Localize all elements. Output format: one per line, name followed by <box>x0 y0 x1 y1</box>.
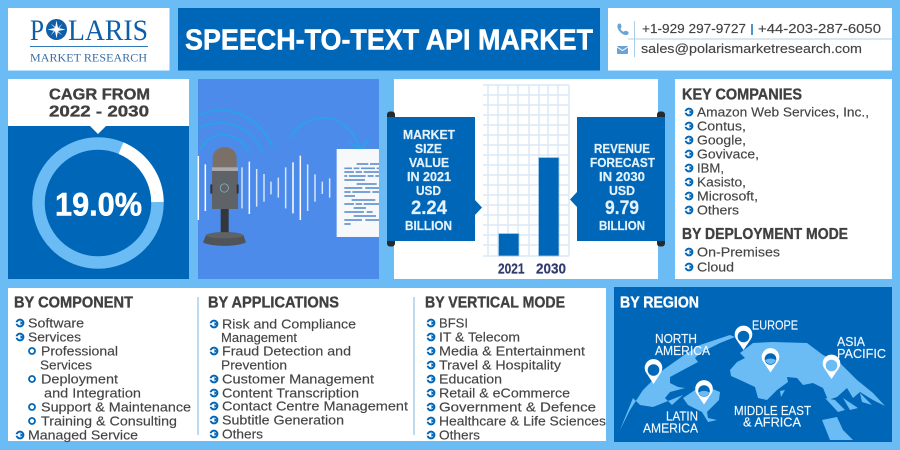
axis labels <box>498 262 566 278</box>
donut chart <box>38 144 158 262</box>
list: component <box>15 316 191 442</box>
list: component: Professional <box>41 344 118 358</box>
panel: by region <box>614 287 892 442</box>
transcript document <box>337 149 379 237</box>
callout: revenue forecast: 9.79 <box>605 198 639 219</box>
list: key companies: Google, <box>697 132 746 148</box>
list: applications: Management <box>221 330 297 345</box>
list: key companies: Contus, <box>697 118 746 134</box>
list: key companies: Others <box>697 202 740 218</box>
CAGR heading <box>49 86 150 120</box>
list: applications: Contact Centre Management <box>222 398 408 414</box>
CAGR heading: 2022 - 2030 <box>49 104 149 120</box>
list: key companies: IBM, <box>697 160 724 176</box>
phone numbers: +1-929 297-9727 <box>642 21 746 36</box>
list: component: Deployment <box>41 372 118 386</box>
list: key companies: Microsoft, <box>697 188 758 204</box>
title banner: SPEECH-TO-TEXT API MARKET <box>185 24 593 56</box>
list: component: Managed Service <box>28 428 138 442</box>
list: applications: Prevention <box>221 358 287 372</box>
contact panel <box>608 8 892 70</box>
phone numbers <box>642 21 881 36</box>
microphone <box>203 147 246 246</box>
callout: market size value: IN 2021 <box>407 169 451 184</box>
label: Middle East and Africa: & AFRICA <box>743 414 801 430</box>
list: vertical mode: Travel & Hospitality <box>439 358 562 372</box>
panel: segments <box>8 288 607 442</box>
heading: by applications: BY APPLICATIONS <box>208 294 339 312</box>
sound arcs <box>198 110 272 153</box>
panel: key companies and deployment mode <box>675 79 892 279</box>
list: deployment mode: On-Premises <box>697 244 781 260</box>
list: key companies: Kasisto, <box>697 174 746 190</box>
panel: speech illustration <box>198 79 379 279</box>
list: component: Services <box>40 358 93 372</box>
list: key companies: Amazon Web Services, Inc., <box>697 104 869 120</box>
icon: phone <box>617 23 629 35</box>
heading: by component: BY COMPONENT <box>14 294 133 312</box>
label: Europe: EUROPE <box>752 318 798 332</box>
list: key companies <box>684 104 869 218</box>
CAGR heading: CAGR FROM <box>49 86 150 104</box>
pin: Middle East and Africa <box>762 348 779 372</box>
callout: revenue forecast: REVENUE <box>594 141 650 156</box>
callout: market size value: 2.24 <box>411 198 447 219</box>
callout: revenue forecast: IN 2030 <box>599 169 645 184</box>
list: applications: Customer Management <box>222 372 374 386</box>
callout: market size value: VALUE <box>409 155 449 170</box>
list: applications: Subtitle Generation <box>222 412 344 428</box>
list: component: Training & Consulting <box>41 414 177 428</box>
callout: revenue forecast: USD <box>609 183 635 198</box>
list: component: Services <box>28 330 82 344</box>
axis labels: 2021 <box>498 262 524 278</box>
callout: revenue forecast <box>570 112 665 246</box>
list: component: Software <box>28 316 84 330</box>
list: applications: Others <box>222 426 264 442</box>
list: vertical mode: IT & Telecom <box>439 330 520 344</box>
axis labels: 2030 <box>536 262 566 278</box>
world map <box>620 335 885 440</box>
logo: Polaris Market Research <box>8 8 170 70</box>
list: vertical mode: Education <box>439 372 502 386</box>
callout: market size value: BILLION <box>405 218 452 233</box>
logo: Polaris Market Research: P <box>30 14 44 47</box>
list: vertical mode: Government & Defence <box>439 400 596 414</box>
heading: by region: BY REGION <box>620 294 699 312</box>
label: Middle East and Africa: MIDDLE EAST <box>734 403 811 418</box>
list: deployment mode <box>684 244 781 274</box>
callout: market size value <box>387 112 482 246</box>
list: vertical mode: Media & Entertainment <box>439 344 585 358</box>
bar chart grid <box>483 85 569 256</box>
callout: revenue forecast: BILLION <box>599 218 645 233</box>
label: Latin America <box>643 408 698 436</box>
CAGR value: 19.0% <box>55 186 142 222</box>
label: Middle East and Africa <box>734 403 811 430</box>
sound wave <box>198 156 330 220</box>
list: vertical mode <box>426 316 607 442</box>
list: component: Support & Maintenance <box>41 400 191 414</box>
list: applications <box>209 316 408 442</box>
label: Asia Pacific: PACIFIC <box>837 346 886 361</box>
heading: by vertical mode: BY VERTICAL MODE <box>425 294 565 312</box>
list: vertical mode: BFSI <box>439 316 468 330</box>
list: vertical mode: Healthcare & Life Sciences <box>439 414 607 428</box>
heading: by deployment mode: BY DEPLOYMENT MODE <box>682 226 848 243</box>
pin: Latin America <box>695 380 713 404</box>
logo: Polaris Market Research: MARKET RESEARCH <box>30 50 147 64</box>
label: Asia Pacific <box>837 334 886 361</box>
icon: mail <box>617 46 628 54</box>
bar: 2021 <box>498 234 519 256</box>
pin: Asia Pacific <box>823 355 840 379</box>
panel: market size chart <box>394 79 658 279</box>
pin: North America <box>645 359 662 384</box>
callout: market size value: MARKET <box>403 127 455 142</box>
list: vertical mode: Others <box>439 428 481 442</box>
list: applications: Risk and Compliance <box>222 316 356 332</box>
list: vertical mode: Retail & eCommerce <box>439 386 570 400</box>
list: deployment mode: Cloud <box>697 260 734 274</box>
title banner <box>178 8 600 70</box>
list: applications: Content Transcription <box>222 386 359 400</box>
heading: key companies: KEY COMPANIES <box>682 86 802 104</box>
list: component: and Integration <box>44 386 141 400</box>
bar: 2030 <box>538 158 559 256</box>
panel: CAGR <box>8 79 189 279</box>
label: Latin America: LATIN <box>666 408 698 424</box>
list: applications: Fraud Detection and <box>222 344 351 358</box>
label: Asia Pacific: ASIA <box>837 334 865 349</box>
callout: market size value: SIZE <box>415 141 442 156</box>
phone numbers: +44-203-287-6050 <box>758 21 881 36</box>
callout: market size value: USD <box>416 183 441 198</box>
label: North America: NORTH <box>655 331 697 346</box>
label: Latin America: AMERICA <box>643 420 698 436</box>
callout: revenue forecast: FORECAST <box>590 155 655 170</box>
list: key companies: Govivace, <box>697 146 759 162</box>
transcription arrow <box>290 118 369 151</box>
logo: Polaris Market Research: LARIS <box>68 14 148 47</box>
label: North America: AMERICA <box>655 343 710 358</box>
pin: Europe <box>735 326 752 350</box>
label: North America <box>655 331 710 358</box>
email: sales@polarismarketresearch.com <box>641 41 862 56</box>
